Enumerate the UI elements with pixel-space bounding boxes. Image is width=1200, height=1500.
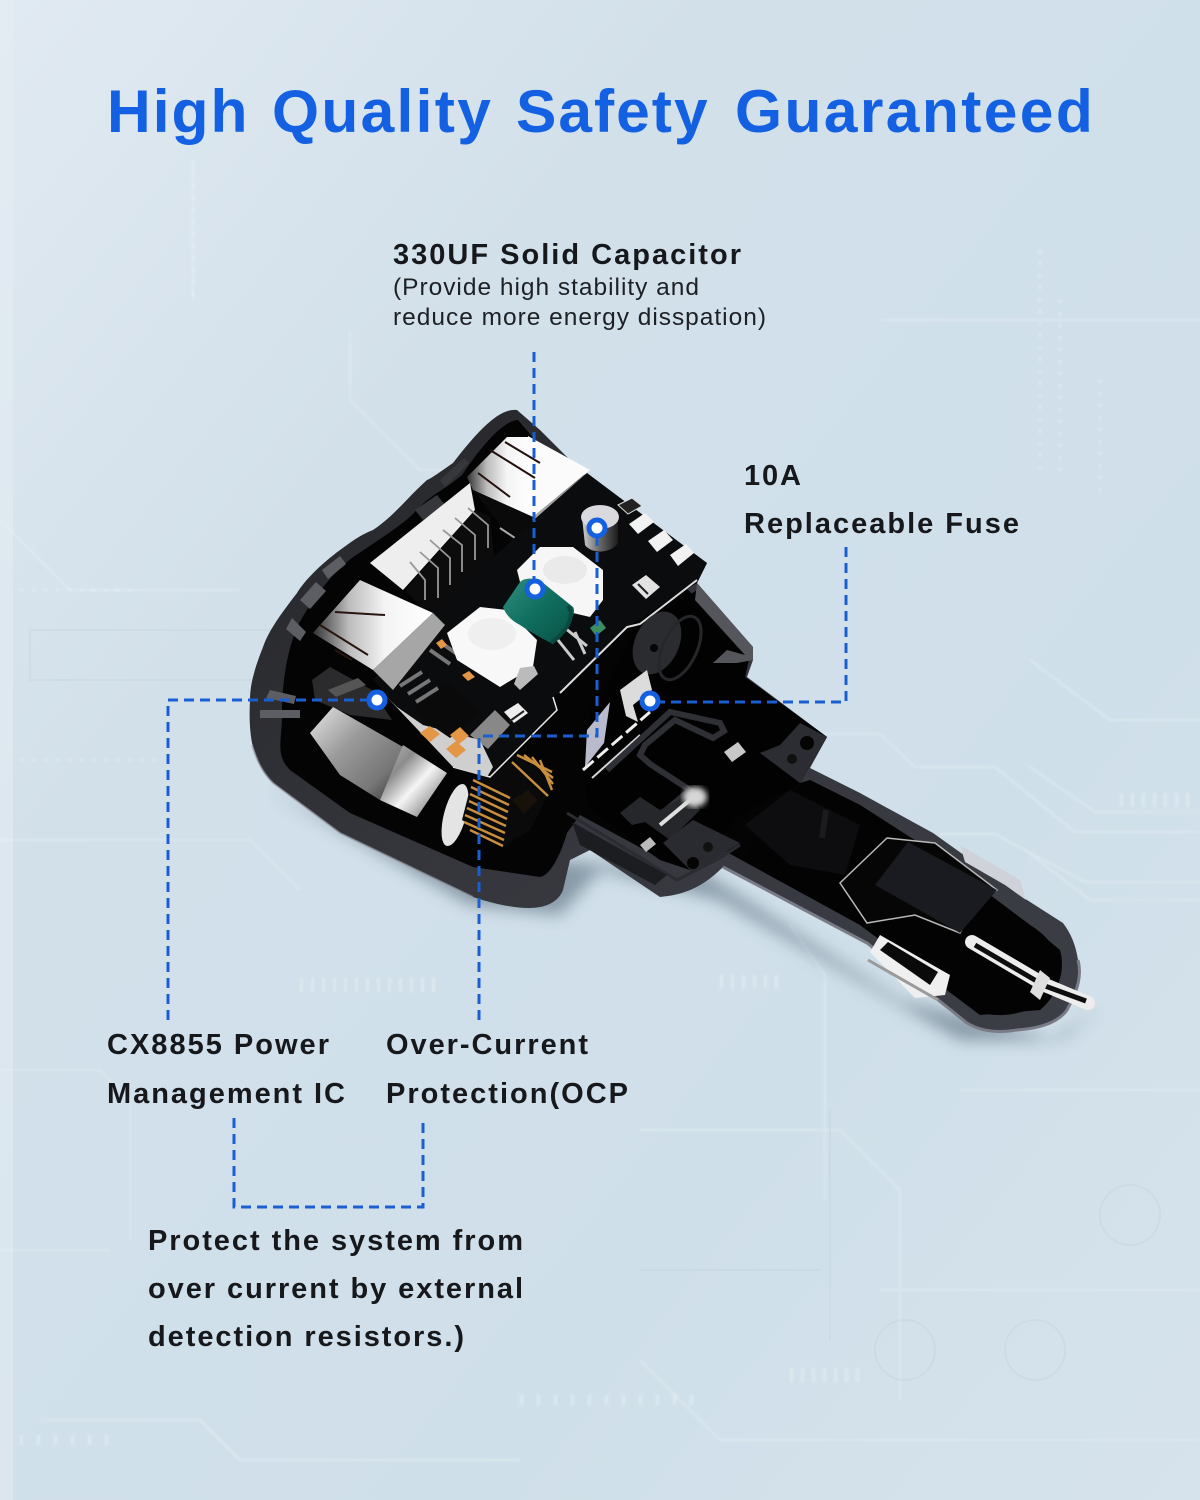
label: CX8855 Power Management IC: CX8855 Power <box>107 1029 329 1061</box>
title: High <box>107 77 249 145</box>
fuse clip <box>620 670 652 722</box>
label: 330UF Solid Capacitor: reduce more energy disspation) <box>393 304 766 331</box>
white tactile buttons <box>447 607 537 687</box>
shiny metal bits <box>724 742 746 762</box>
callout line: fuse <box>642 547 846 709</box>
title: Safety <box>516 77 710 145</box>
lower spring clip <box>868 935 950 1000</box>
text block: protection description: detection resistors.) <box>148 1321 464 1353</box>
circuit board <box>373 473 707 777</box>
slats on the left inner wall <box>260 556 346 718</box>
label: 10A Replaceable Fuse: Replaceable Fuse <box>744 508 1019 540</box>
lattice plate left <box>620 795 700 840</box>
label: CX8855 Power Management IC: Management IC <box>107 1078 345 1110</box>
title: Guaranteed <box>735 77 1095 145</box>
right chamber <box>567 583 827 885</box>
label: 330UF Solid Capacitor: (Provide high stability and <box>393 274 699 301</box>
label: Over-Current Protection <box>386 1029 628 1110</box>
buzzer <box>623 604 691 682</box>
label: 10A Replaceable Fuse <box>744 460 1019 540</box>
small green part and board leads <box>590 620 606 636</box>
light rim, left edge <box>252 745 473 897</box>
plug barrel <box>840 838 997 933</box>
silver small capacitor <box>582 517 618 552</box>
text block: protection description: Protect the system from <box>148 1225 523 1257</box>
upper spring clip <box>960 845 1026 900</box>
plug handle <box>723 780 1088 1032</box>
label: 330UF Solid Capacitor: 330UF Solid Capacitor <box>393 239 741 271</box>
centre pin header <box>370 483 495 617</box>
callout line: over-current protection <box>479 520 605 1020</box>
grey rim top right <box>695 583 753 663</box>
callout line: power management IC <box>168 692 385 1020</box>
lattice plate upper right <box>760 723 827 783</box>
fuse window <box>585 702 610 767</box>
callout line: capacitor <box>527 352 543 597</box>
orange SMD parts <box>420 639 475 758</box>
lower USB port <box>313 580 433 670</box>
small parts by cylinder <box>312 667 392 720</box>
centre pin <box>972 942 1088 1003</box>
upper USB port <box>467 436 590 548</box>
product: opened car charger adapter <box>250 410 1100 1040</box>
text block: protection description: over current by external <box>148 1273 523 1305</box>
lower base plate <box>567 813 740 880</box>
lattice plate lower <box>663 820 740 873</box>
label: Over-Current Protection: Over-Current <box>386 1029 588 1061</box>
bracket connector to description <box>234 1118 423 1207</box>
green electrolytic capacitor <box>503 579 574 643</box>
speckled solder strip <box>373 613 445 690</box>
silver cylinder capacitor <box>310 707 447 817</box>
glare along lower edge <box>385 695 493 777</box>
label: CX8855 Power Management IC <box>107 1029 345 1110</box>
label: 10A Replaceable Fuse: 10A <box>744 460 801 492</box>
white pads <box>629 513 694 566</box>
copper coil inductor <box>436 753 553 849</box>
moulded plastic lattice <box>607 712 724 815</box>
drop shadow <box>270 790 1100 1040</box>
outer shell <box>250 410 1080 1032</box>
label: 330UF Solid Capacitor <box>393 239 766 331</box>
label: Over-Current Protection: Protection(OCP <box>386 1078 628 1110</box>
text block: protection description <box>148 1225 523 1353</box>
title: Quality <box>272 77 493 145</box>
black cavity <box>280 420 1060 1015</box>
